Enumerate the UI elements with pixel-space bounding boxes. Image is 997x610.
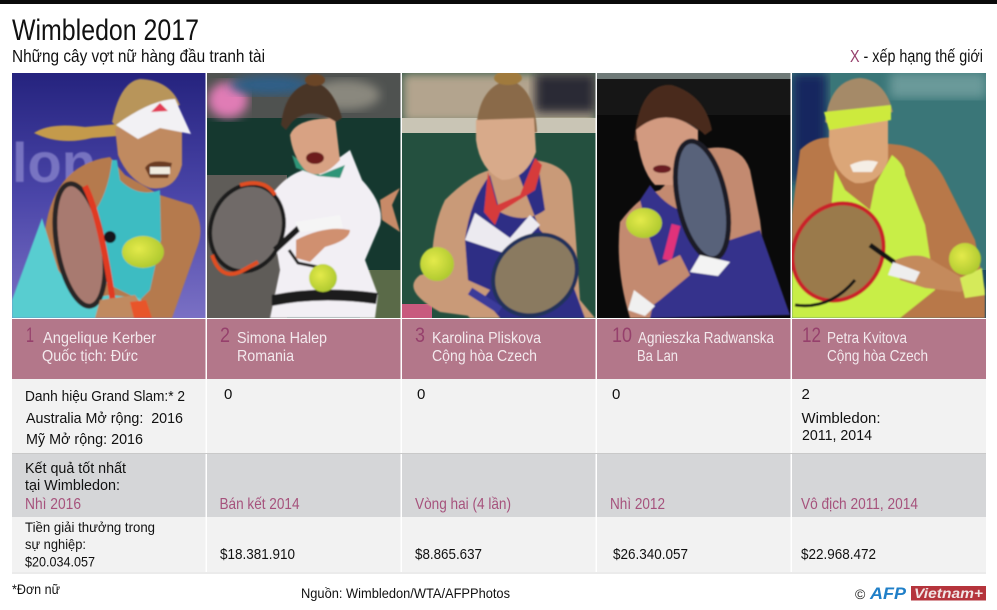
row: Grand Slam titles: 2 [802,386,810,403]
row: Grand Slam titles: 0 [417,386,425,403]
row: Grand Slam titles: 2011, 2014 [802,427,872,444]
row: player names: 12 [802,324,821,347]
row: player names: 1 [26,324,34,347]
row: player names: Agnieszka Radwanska [638,330,774,347]
row: career prize money: $26.340.057 [613,546,688,563]
logos: AFP and Vietnam+ [855,584,986,603]
logos: AFP and Vietnam+: © [855,586,866,602]
row: best Wimbledon result: Vòng hai (4 lần) [415,496,511,513]
row: best Wimbledon result: tại Wimbledon: [25,477,120,494]
row: player names: Angelique Kerber [43,330,157,347]
row: player names: Quốc tịch: Đức [42,348,138,365]
footnote: *Đơn nữ [12,581,60,597]
row: player names: 3 [415,324,425,347]
row: best Wimbledon result: Kết quả tốt nhất [25,460,127,477]
subtitle: Những cây vợt nữ hàng đầu tranh tài [12,46,265,66]
row: career prize money: $8.865.637 [415,546,482,563]
row: Grand Slam titles: Wimbledon: [802,410,880,427]
row: player names: Romania [237,348,294,365]
row: player names: Cộng hòa Czech [827,348,928,365]
source: Nguồn: Wimbledon/WTA/AFPPhotos [301,585,510,601]
row: career prize money: Tiền giải thưởng trong [25,519,155,535]
row: best Wimbledon result: Nhì 2016 [25,496,81,513]
row: Grand Slam titles: Mỹ Mở rộng: 2016 [26,431,143,448]
logos: AFP and Vietnam+: AFP [869,584,907,603]
row: career prize money [12,517,986,574]
row: player names: Petra Kvitova [827,330,907,347]
row: player names: 2 [220,324,230,347]
row: best Wimbledon result: Vô địch 2011, 2014 [801,496,918,513]
top rule [0,0,997,4]
row: best Wimbledon result: Bán kết 2014 [220,496,300,513]
photo: Simona Halep [199,73,401,318]
photo: Karolina Pliskova [402,71,596,332]
row: Grand Slam titles: Danh hiệu Grand Slam:* 2 [25,388,185,405]
title: Wimbledon 2017 [12,14,199,47]
row: Grand Slam titles: 0 [612,386,620,403]
row: player names: Simona Halep [237,330,327,347]
photo: Agnieszka Radwanska [597,73,791,318]
row: Grand Slam titles: 0 [224,386,232,403]
logos: AFP and Vietnam+: Vietnam+ [914,585,983,601]
row: player names: Karolina Pliskova [432,330,541,347]
photo: Petra Kvitova [775,73,986,318]
row: career prize money: $18.381.910 [220,546,295,563]
row: Grand Slam titles [12,379,986,454]
row: player names [12,319,986,379]
row: Grand Slam titles: Australia Mở rộng: 2016 [26,410,183,427]
row: career prize money: sự nghiệp: [25,536,86,552]
photo: Angelique Kerber [12,73,206,318]
row: career prize money: $22.968.472 [801,546,876,563]
row: player names: 10 [612,324,632,347]
row: career prize money: $20.034.057 [25,554,95,570]
row: best Wimbledon result [12,454,986,517]
row: player names: Ba Lan [637,348,678,365]
row: player names: Cộng hòa Czech [432,348,537,365]
photo: Angelique Kerber: lon [12,131,96,194]
row: best Wimbledon result: Nhì 2012 [610,496,665,513]
